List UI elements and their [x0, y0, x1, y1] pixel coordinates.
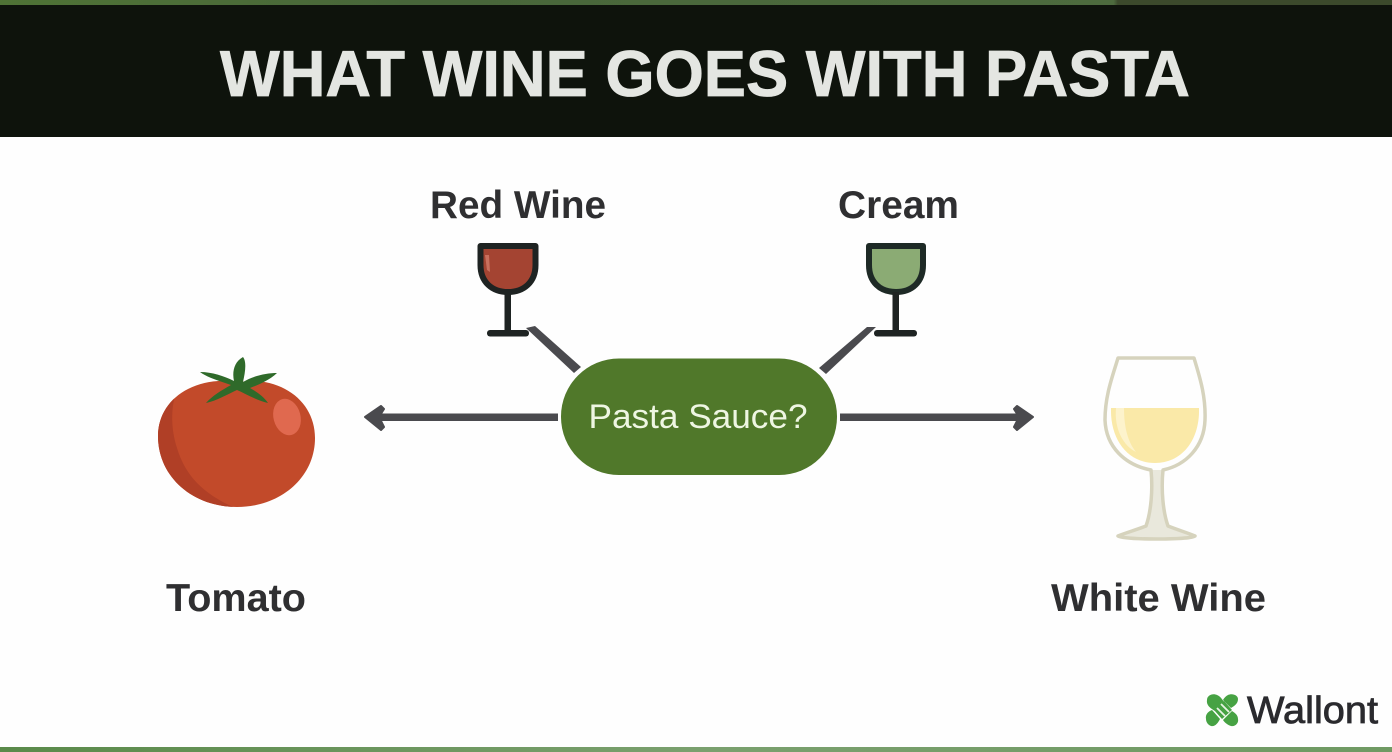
- icon: white wine glass: [1105, 358, 1205, 539]
- icon: cream wine glass: [869, 246, 923, 336]
- icon: tomato: [150, 357, 315, 510]
- tomato leaves: [200, 357, 277, 403]
- arrow: to tomato: [365, 406, 558, 430]
- decision pill: [561, 358, 837, 475]
- icon: red wine glass: [480, 246, 536, 336]
- title: WHAT WINE GOES WITH PASTA: [220, 37, 1190, 110]
- logo wordmark: Wallont: [1247, 690, 1378, 732]
- label: Cream: Cream: [838, 184, 959, 227]
- connector: pill to red wine: [526, 326, 581, 373]
- logo: Wallont: [1206, 690, 1378, 732]
- label: Tomato: Tomato: [166, 577, 306, 620]
- label: White Wine: White Wine: [1051, 577, 1266, 620]
- pill text: Pasta Sauce?: [588, 398, 808, 436]
- arrow: to white wine: [840, 406, 1033, 430]
- label: Red Wine: Red Wine: [430, 184, 606, 227]
- bottom strip: [0, 747, 1392, 752]
- header band: [0, 0, 1392, 137]
- logo icon: [1206, 694, 1238, 726]
- connector: pill to cream: [819, 327, 876, 374]
